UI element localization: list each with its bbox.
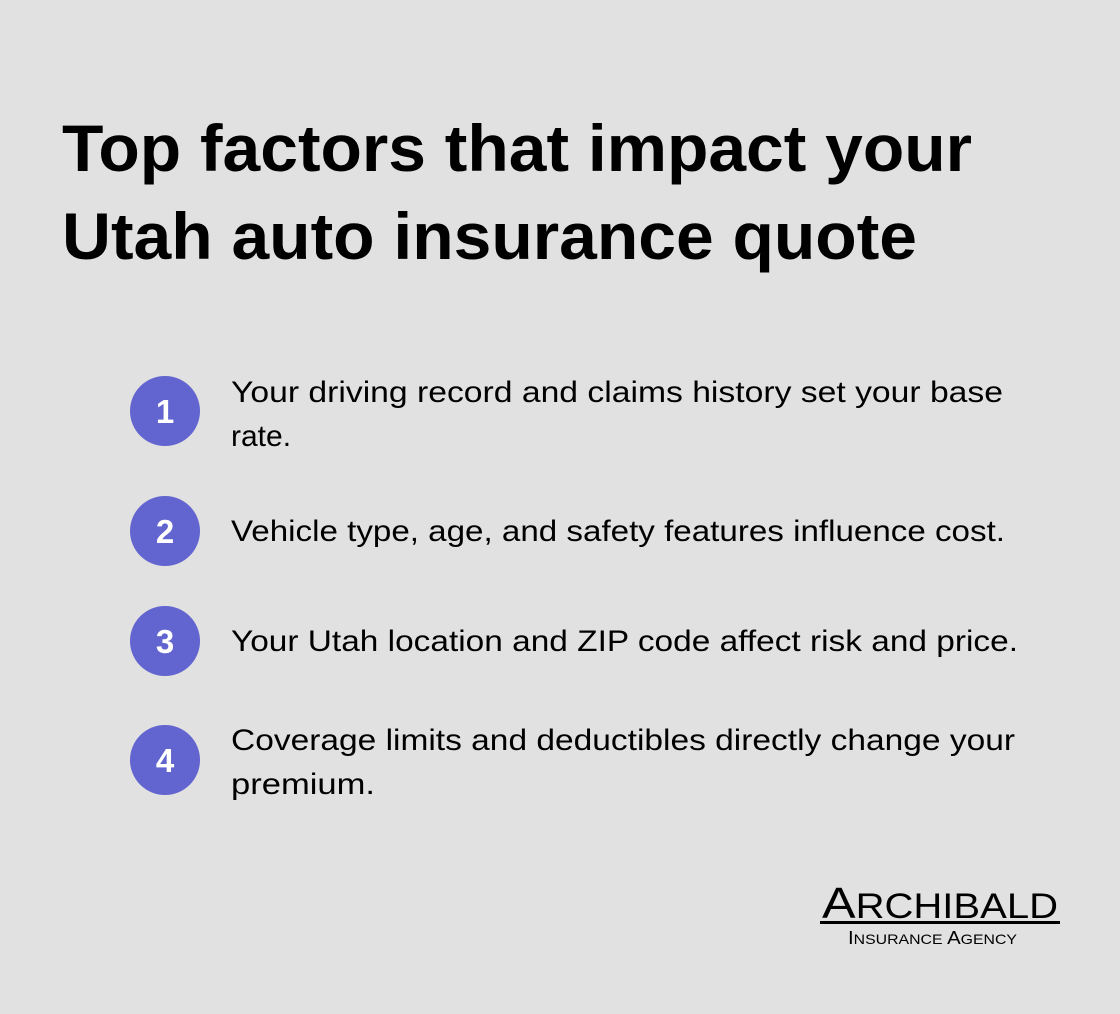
icon: number 1: 1 — [156, 393, 174, 430]
icon: number 2 — [130, 496, 200, 566]
text 1: Your driving record and claims history set your base — [231, 376, 1003, 409]
title: Utah auto insurance quote — [62, 199, 917, 273]
icon: number 3: 3 — [156, 623, 174, 660]
item 3 — [130, 606, 1018, 676]
text 4 — [231, 724, 1015, 801]
text 1: rate. — [231, 420, 291, 453]
logo — [820, 879, 1060, 948]
icon: number 3 — [130, 606, 200, 676]
icon: number 2: 2 — [156, 513, 174, 550]
title — [62, 111, 972, 273]
text 4: premium. — [231, 768, 375, 801]
item 2 — [130, 496, 1005, 566]
icon: number 1 — [130, 376, 200, 446]
item 4 — [130, 724, 1015, 801]
text 4: Coverage limits and deductibles directly change your — [231, 724, 1015, 757]
icon: number 4 — [130, 725, 200, 795]
title: Top factors that impact your — [62, 111, 972, 185]
text 2: Vehicle type, age, and safety features influence cost. — [231, 515, 1005, 548]
text 1 — [231, 376, 1003, 453]
item 1 — [130, 376, 1003, 453]
text 3: Your Utah location and ZIP code affect risk and price. — [231, 625, 1018, 658]
logo: INSURANCE AGENCY — [848, 928, 1018, 948]
icon: number 4: 4 — [156, 742, 175, 779]
logo: ARCHIBALD — [822, 879, 1058, 928]
